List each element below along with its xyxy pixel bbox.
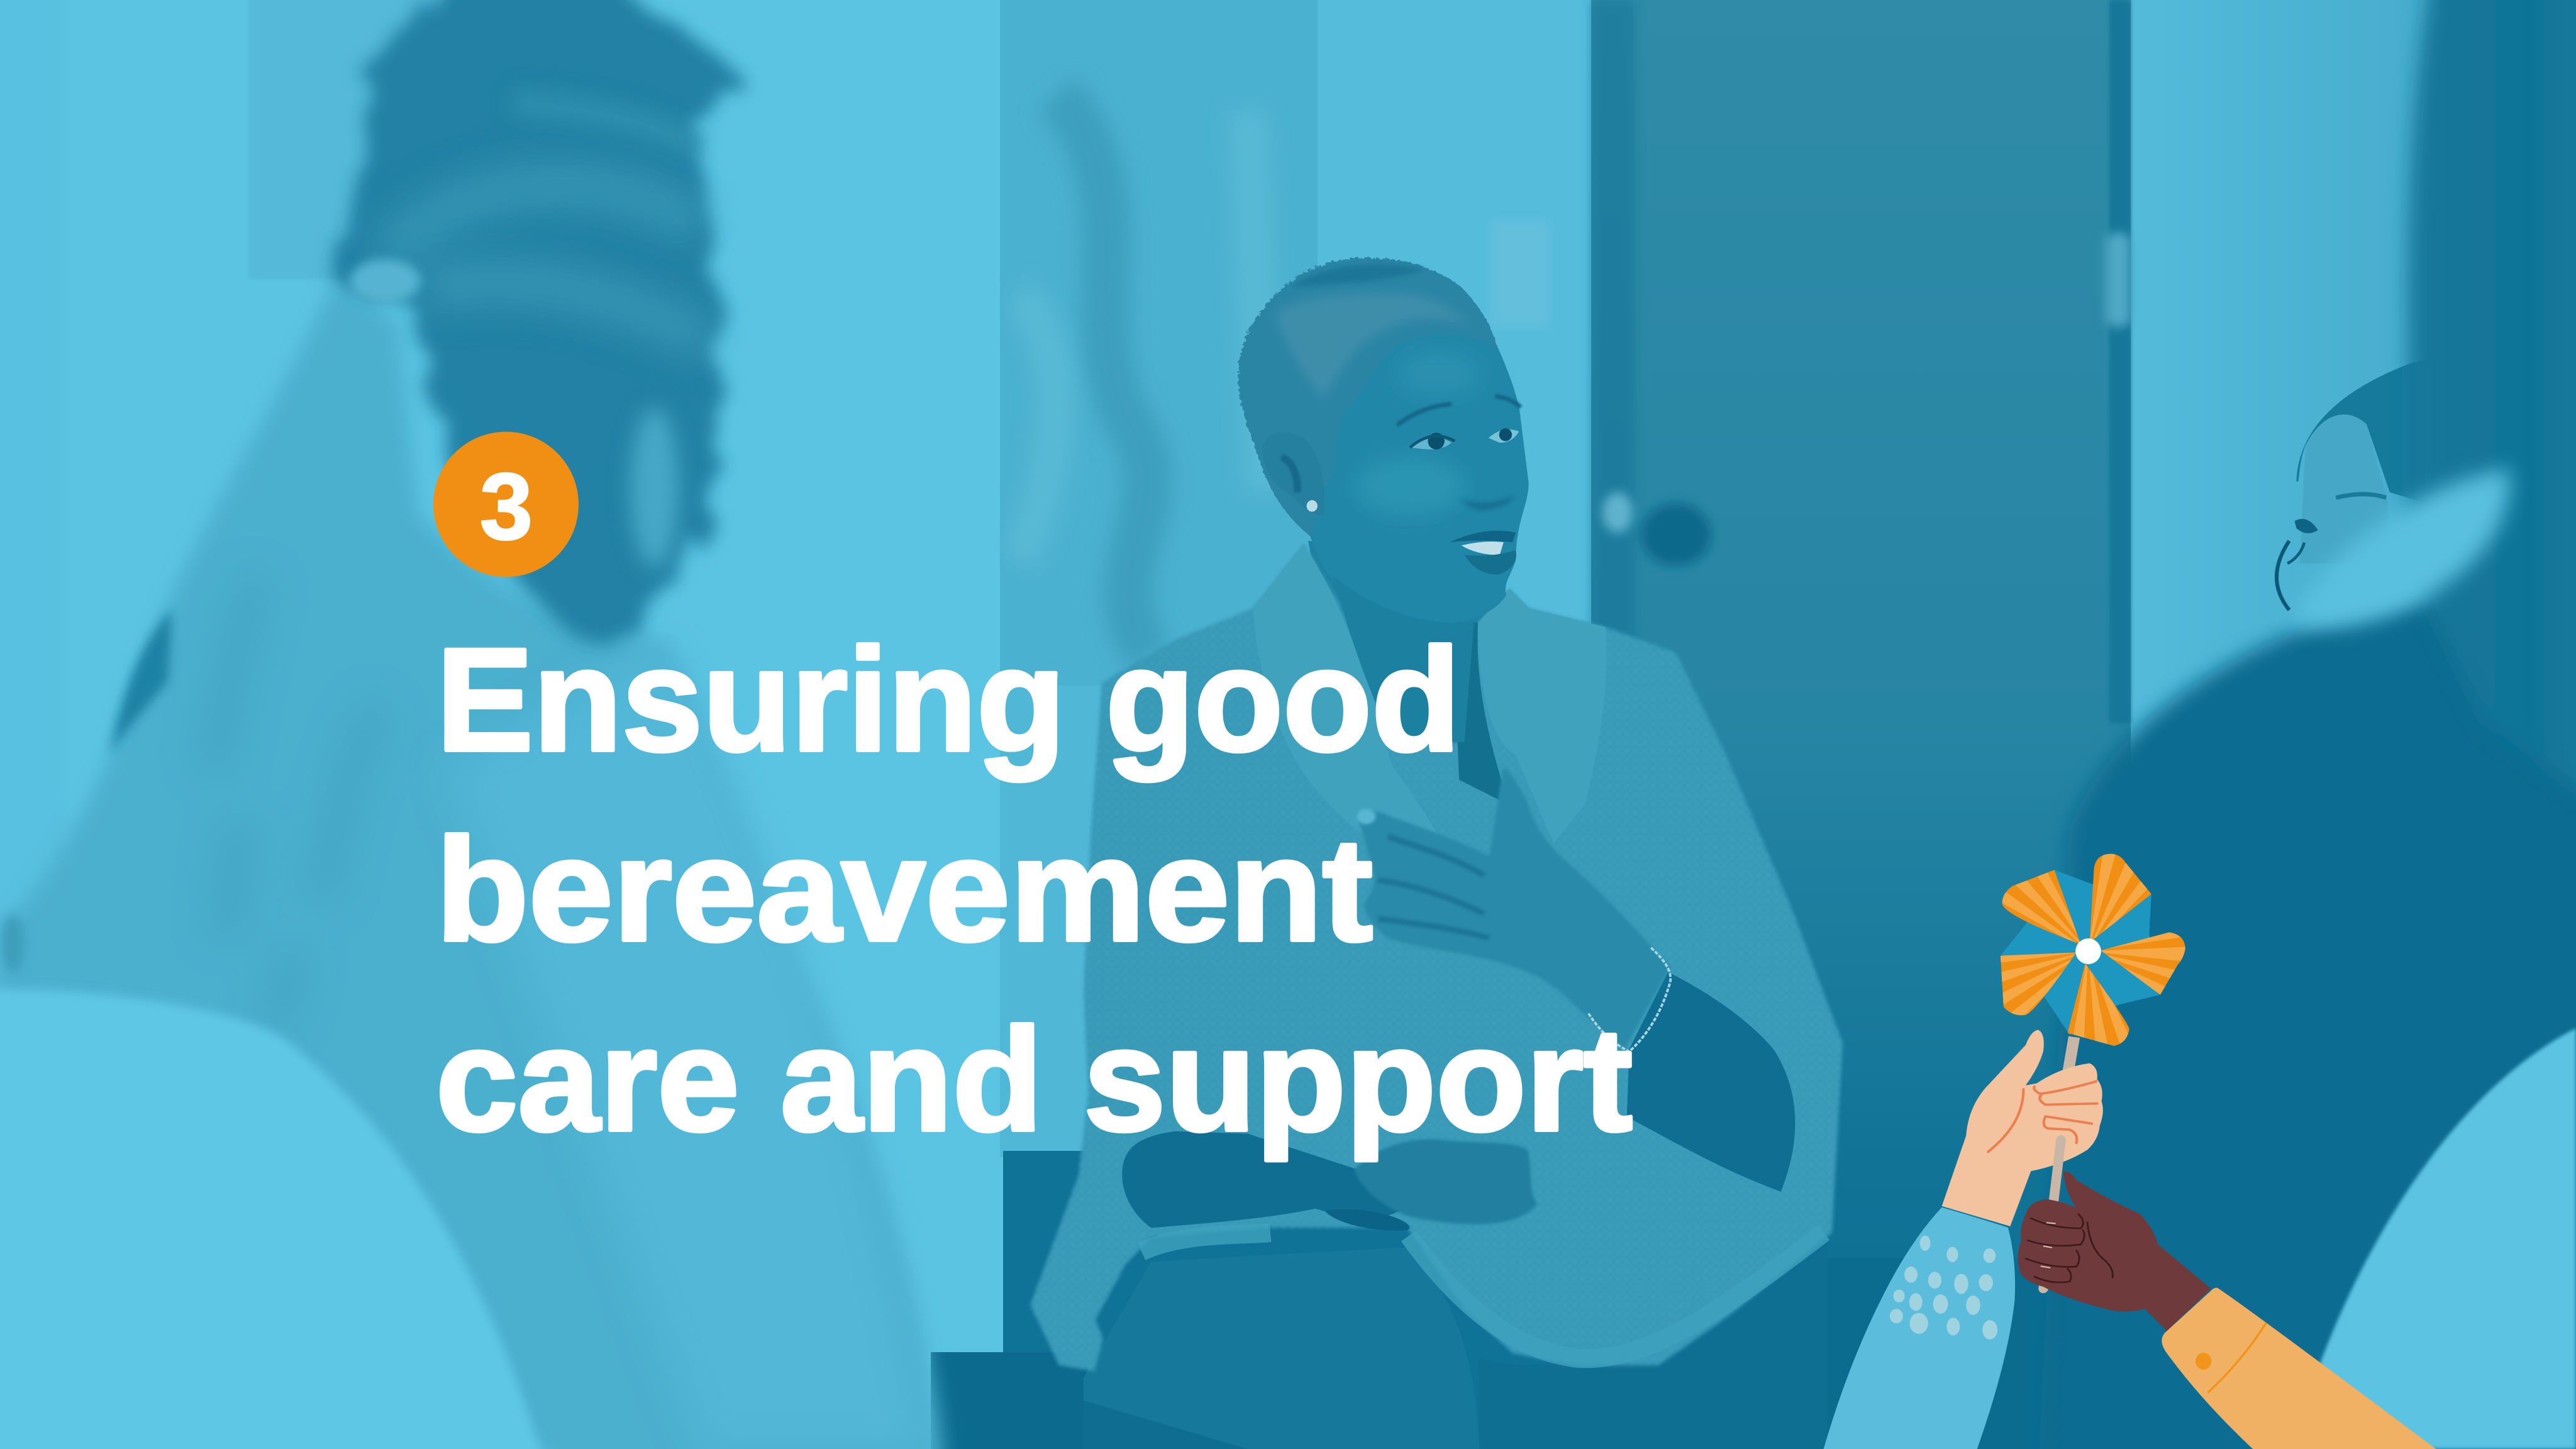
her hair [333,0,735,646]
blurred white collar in front [2289,469,2509,628]
pinwheel stick, upper [2068,1037,2074,1075]
number badge: 3 [480,453,533,559]
title: care and support [436,998,1633,1162]
dark sleeve right [1627,972,1795,1192]
title [436,618,1633,1162]
illustration: two hands holding a pinwheel [1824,854,2436,1449]
yellow sleeve [2162,1288,2436,1449]
eyes [1410,437,1452,450]
title: Ensuring good [436,618,1460,782]
bracelet [1588,948,1670,1052]
hair and face [1238,258,1529,742]
dark sleeve left [1122,1131,1412,1228]
neck shadow [1308,541,1509,818]
trousers [1006,1223,1827,1449]
hand on chest [1357,767,1670,1049]
sweater [1030,544,1843,1371]
left collar [1253,544,1465,880]
number badge [433,431,579,577]
pinwheel stick, lower [2043,1140,2061,1289]
neckline shadow [1453,623,1509,805]
arms and hands [1122,767,1795,1231]
pinwheel [2001,854,2185,1046]
dark hair of the near person [2408,0,2576,818]
right collar [1478,589,1606,843]
blue sleeve [1824,1208,2015,1449]
title: bereavement [436,808,1373,972]
lower hand [1354,1140,1538,1224]
person on the right, blurred [2038,0,2576,1449]
hair [1238,258,1498,537]
chair bottom left [0,989,546,1449]
face [1311,303,1529,624]
ear [1262,433,1324,516]
sweater hem highlights [1141,1233,1824,1358]
mouth [1450,531,1516,542]
chair bottom right [2292,1028,2576,1449]
her body and ponytail [0,282,943,1449]
light-skinned hand [1942,1030,2103,1226]
seated woman partly hidden [2287,359,2426,564]
central woman [1006,258,1843,1449]
dark-skinned hand [2018,1172,2211,1331]
blurred woman on the left [0,0,943,1449]
